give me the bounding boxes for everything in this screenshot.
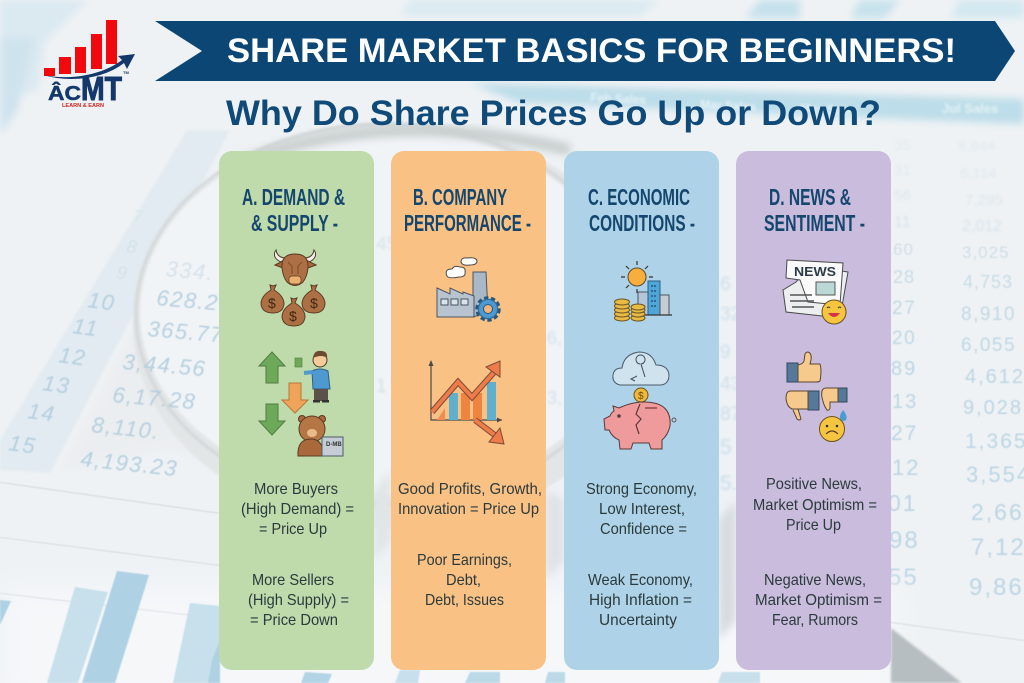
panel A: demand and supply: [219, 151, 374, 670]
body text D: Fear, Rumors: [772, 612, 858, 629]
background: financial table with magnifier: 6,17.28: [112, 382, 197, 414]
body text C: Confidence =: [600, 521, 687, 538]
body text C: Low Interest,: [599, 501, 685, 518]
background: financial table with magnifier: 2,012: [962, 218, 1002, 235]
subtitle: Why Do Share Prices Go Up or Down?: [226, 94, 881, 133]
body text B: Good Profits, Growth,: [398, 481, 542, 498]
background: financial table with magnifier: 60: [893, 240, 914, 259]
blurred column headers: Jul Sales: [942, 101, 998, 116]
background: financial table with magnifier: 87: [720, 404, 741, 425]
background: financial table with magnifier: 20: [892, 328, 916, 349]
background: financial table with magnifier: 55: [888, 564, 919, 591]
logo wordmark: TM: [123, 70, 129, 75]
icon: bull and money bags: $: [310, 295, 318, 311]
logo wordmark: MT: [81, 70, 122, 107]
body text C: Uncertainty: [599, 612, 677, 629]
body text B: [398, 481, 542, 609]
background: financial table with magnifier: 4,753: [963, 272, 1013, 292]
blurred column headers: Feb Sales: [590, 90, 647, 107]
background: financial table with magnifier: 365.77: [147, 316, 225, 348]
background: financial table with magnifier: 43: [720, 374, 741, 395]
background: financial table with magnifier: 13: [41, 370, 72, 399]
body text C: Weak Economy,: [588, 572, 693, 589]
heading A: & SUPPLY -: [251, 210, 338, 236]
diagonal number column band: [0, 130, 230, 473]
background: financial table with magnifier: 5.: [720, 472, 738, 495]
body text B: Debt, Issues: [425, 592, 504, 609]
logo wordmark: ÂC: [48, 81, 81, 105]
body text A: = Price Up: [259, 521, 327, 538]
background: financial table with magnifier: 9: [115, 262, 130, 284]
banner title text: SHARE MARKET BASICS FOR BEGINNERS!: [227, 32, 956, 70]
body text D: Market Optimism =: [753, 497, 877, 514]
icon: cloud, coin and broken piggy bank: $: [638, 391, 644, 402]
icon: torn newspaper with smiley: NEWS: [794, 264, 836, 279]
body text A: More Sellers: [252, 572, 334, 589]
body text C: High Inflation =: [589, 592, 692, 609]
background: financial table with magnifier: 89: [891, 358, 917, 380]
panel C: economic conditions: [564, 151, 719, 670]
icon: torn newspaper with smiley: [783, 260, 848, 324]
background: financial table with magnifier: 7: [131, 206, 146, 228]
background: financial table with magnifier: 5: [720, 436, 732, 459]
background: financial table with magnifier: 27: [891, 422, 918, 445]
bottom bars: [0, 571, 760, 683]
body text A: More Buyers: [254, 481, 338, 498]
background: financial table with magnifier: 9,86: [969, 574, 1024, 601]
panel B: company performance: [391, 151, 546, 670]
background: financial table with magnifier: 8,110.: [90, 412, 161, 444]
background: financial table with magnifier: 98: [889, 527, 920, 554]
background: financial table with magnifier: 10: [86, 287, 117, 316]
body text D: Price Up: [786, 517, 841, 534]
background: financial table with magnifier: 2: [375, 499, 386, 520]
background: financial table with magnifier: 45: [376, 234, 397, 255]
body text A: [241, 481, 354, 629]
background: financial table with magnifier: 35: [894, 137, 911, 154]
lower page shading: [0, 585, 900, 683]
background: financial table with magnifier: 3,025: [962, 243, 1010, 262]
background: financial table with magnifier: 11: [894, 214, 911, 231]
heading C: CONDITIONS -: [589, 210, 695, 236]
icon: rising and falling chart: [428, 360, 504, 444]
icon: bull and money bags: [261, 250, 325, 326]
background: financial table with magnifier: 6: [720, 274, 731, 295]
logo: ACMT Learn and Earn: [43, 20, 135, 109]
body text B: Innovation = Price Up: [398, 501, 539, 518]
panel D: news and sentiment: [736, 151, 891, 670]
heading B: PERFORMANCE -: [404, 210, 531, 236]
background: financial table with magnifier: 12: [892, 455, 920, 480]
body text C: [586, 481, 697, 629]
background: financial table with magnifier: 01: [888, 490, 918, 516]
background: financial table with magnifier: 6,055: [961, 335, 1016, 356]
heading D: SENTIMENT -: [764, 210, 865, 236]
body text D: Negative News,: [764, 572, 866, 589]
background: financial table with magnifier: 9: [720, 342, 731, 363]
icon: supply and demand arrows with person and bear: [259, 351, 343, 456]
body text A: (High Supply) =: [248, 592, 349, 609]
heading D: [764, 184, 865, 236]
heading B: B. COMPANY: [413, 184, 507, 210]
blurred column headers: May Sales: [800, 101, 859, 118]
background: financial table with magnifier: 15: [7, 430, 38, 459]
icon: bull and money bags: $: [268, 295, 276, 311]
body text C: Strong Economy,: [586, 481, 697, 498]
background: financial table with magnifier: 14: [26, 398, 57, 427]
icon: bull and money bags: $: [289, 308, 297, 324]
background: financial table with magnifier: 628.2: [156, 285, 220, 315]
body text D: [753, 476, 882, 629]
background: financial table with magnifier: 56: [894, 187, 911, 204]
logo wordmark: LEARN & EARN: [62, 103, 104, 109]
background: financial table with magnifier: 31: [894, 162, 911, 179]
background: financial table with magnifier: 11: [71, 313, 100, 342]
background: financial table with magnifier: 3,: [547, 388, 562, 408]
heading C: C. ECONOMIC: [588, 184, 690, 210]
heading A: [242, 184, 345, 236]
icon: cloud, coin and broken piggy bank: [604, 352, 676, 449]
background: financial table with magnifier: 27: [892, 298, 916, 319]
background: financial table with magnifier: 6,114: [960, 165, 996, 182]
background: financial table with magnifier: 12: [57, 342, 88, 371]
background: financial table with magnifier: 8: [125, 236, 140, 258]
body text B: Poor Earnings,: [417, 552, 512, 569]
logo wordmark: [48, 70, 129, 109]
magnifier glass: [133, 122, 651, 528]
icon: supply and demand arrows with person and bear: D-MB: [326, 442, 342, 448]
heading A: A. DEMAND &: [242, 184, 345, 210]
background: financial table with magnifier: 9,028: [963, 397, 1023, 419]
icon: sun, city and coins: [614, 261, 672, 321]
logo swoosh arrow: [43, 54, 135, 79]
body text B: Debt,: [446, 572, 481, 589]
body text A: (High Demand) =: [241, 501, 354, 518]
blurred column headers: [590, 90, 998, 118]
heading D: D. NEWS &: [769, 184, 851, 210]
icon: factory with gear: [437, 258, 498, 320]
title banner: [155, 21, 1015, 81]
heading B: [404, 184, 531, 236]
background: financial table with magnifier: 8,844: [958, 138, 996, 155]
background: financial table with magnifier: 3,44.56: [122, 349, 207, 381]
background: financial table with magnifier: 4,193.23: [79, 446, 179, 481]
background: financial table with magnifier: 13: [892, 391, 918, 413]
icon: thumbs up, thumbs down and sad face: [786, 352, 847, 442]
blurred column headers: Mar Sales: [700, 97, 757, 114]
background: financial table with magnifier: 8,910: [961, 304, 1016, 325]
background: financial table with magnifier: 4,612: [965, 366, 1024, 388]
background: financial table with magnifier: 334.: [165, 256, 215, 285]
body text A: = Price Down: [250, 612, 338, 629]
body text D: Positive News,: [766, 476, 862, 493]
heading C: [588, 184, 695, 236]
body text D: Market Optimism =: [755, 592, 882, 609]
background: financial table with magnifier: 32: [720, 304, 741, 325]
background: financial table with magnifier: 28: [893, 267, 915, 287]
logo rising red bars: [44, 20, 117, 76]
background: financial table with magnifier: 1: [376, 376, 387, 397]
background: financial table with magnifier: 7,295: [965, 192, 1003, 209]
background: financial table with magnifier: 2,66: [971, 499, 1024, 525]
background: financial table with magnifier: 6,: [547, 328, 562, 348]
